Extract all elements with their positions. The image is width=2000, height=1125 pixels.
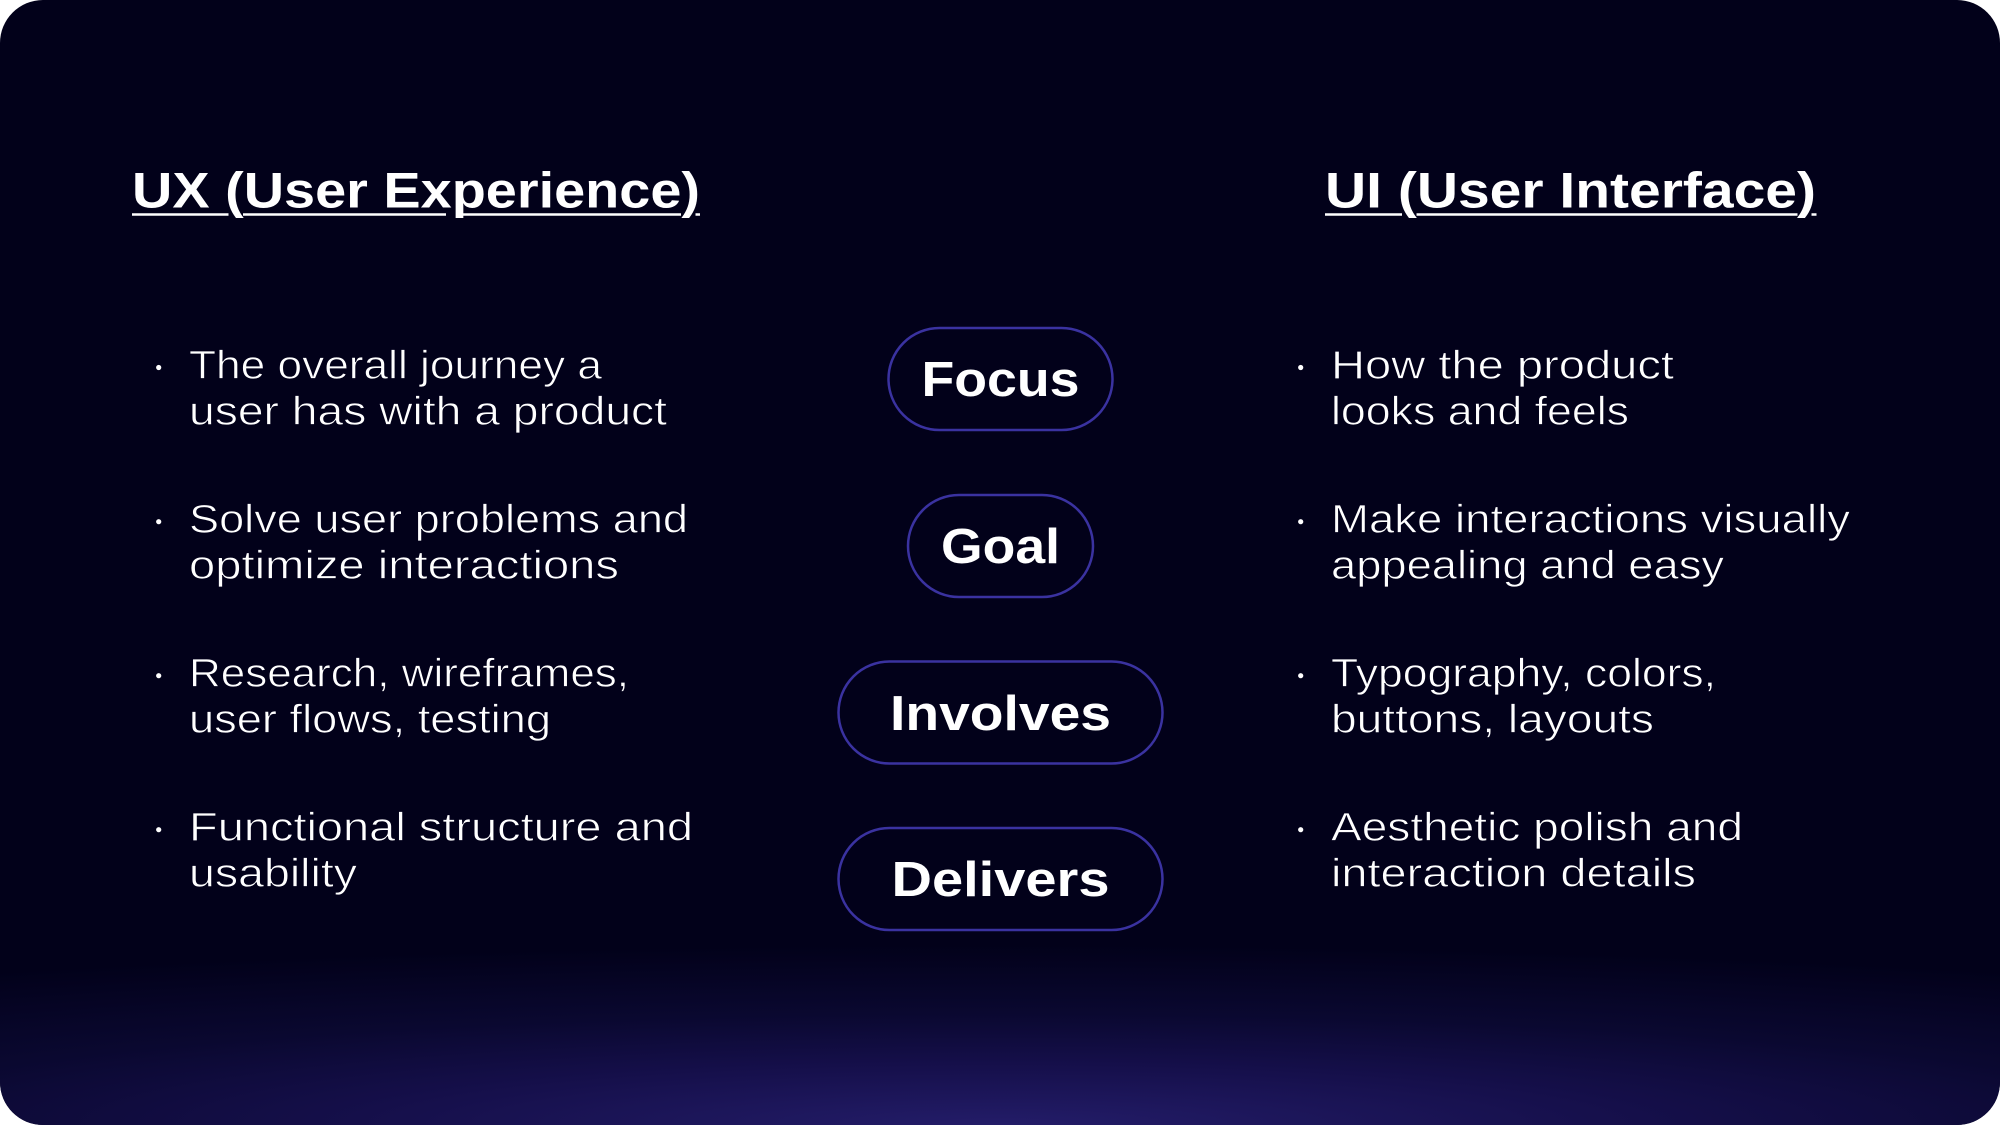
UX point: overall journey	[156, 344, 667, 434]
UI point: typography: buttons, layouts	[1331, 698, 1654, 742]
pill: Goal: Goal	[941, 520, 1060, 574]
UX point: overall journey: user has with a product	[189, 390, 667, 434]
UI point: looks and feels	[1298, 344, 1674, 434]
pill: Delivers	[838, 828, 1162, 930]
UX point: structure	[156, 806, 693, 896]
UX point: solve problems: Solve user problems and	[189, 498, 688, 542]
UX point: research	[156, 652, 629, 742]
heading: UI (User Interface): UI (User Interface)	[1325, 162, 1816, 218]
UI point: polish: interaction details	[1331, 852, 1696, 896]
UI point: looks and feels: How the product	[1331, 344, 1674, 388]
pill: Delivers: Delivers	[892, 853, 1110, 907]
UX point: structure: Functional structure and	[189, 806, 693, 850]
UX point: research: Research, wireframes,	[189, 652, 629, 696]
UX point: solve problems	[156, 498, 688, 588]
pill: Focus: Focus	[922, 353, 1080, 407]
UI point: looks and feels: looks and feels	[1331, 390, 1629, 434]
heading: UX (User Experience): UX (User Experience)	[132, 162, 700, 218]
UI point: visually appealing	[1298, 498, 1850, 588]
UX point: overall journey: The overall journey a	[189, 344, 603, 388]
UI point: polish: Aesthetic polish and	[1331, 806, 1743, 850]
pill: Involves	[838, 662, 1162, 764]
list: UI points	[1298, 344, 1850, 896]
UX point: research: user flows, testing	[189, 698, 551, 742]
pill: Focus	[888, 328, 1112, 430]
UI point: typography: Typography, colors,	[1331, 652, 1716, 696]
UI point: visually appealing: appealing and easy	[1331, 544, 1724, 588]
UI point: typography	[1298, 652, 1716, 742]
UI point: polish	[1298, 806, 1743, 896]
pill: Goal	[908, 495, 1093, 597]
UX point: structure: usability	[189, 852, 357, 896]
pill: Involves: Involves	[890, 687, 1111, 741]
list: UX points	[156, 344, 693, 896]
UX point: solve problems: optimize interactions	[189, 544, 619, 588]
UI point: visually appealing: Make interactions visually	[1331, 498, 1850, 542]
